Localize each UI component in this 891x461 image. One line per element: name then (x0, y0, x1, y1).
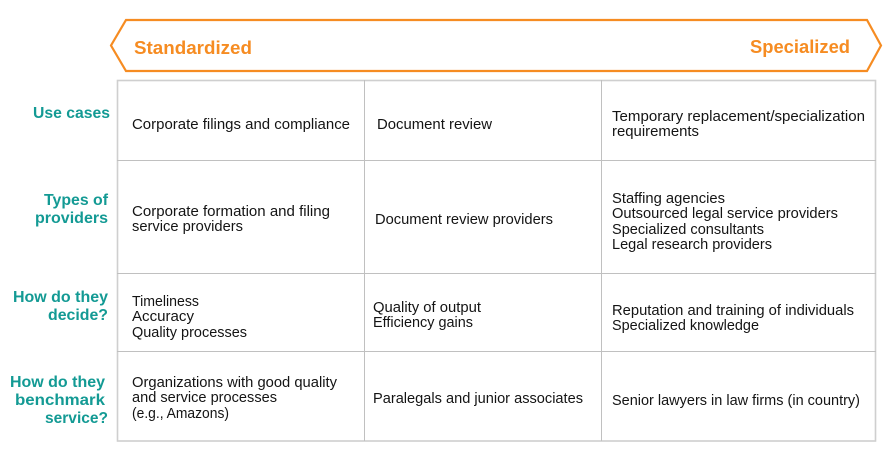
row heading: How do they benchmark service?: service? (45, 410, 108, 427)
row heading: Types of providers: providers (35, 210, 108, 227)
cell: providers, specialized: Legal research providers (612, 237, 772, 253)
table grid (117, 80, 876, 441)
cell: decision, standardized (132, 294, 247, 341)
row heading: How do they decide?: decide? (48, 307, 108, 324)
cell: benchmark, standardized: and service processes (132, 390, 277, 406)
cell: providers, specialized: Specialized consultants (612, 222, 764, 238)
cell: providers, middle: Document review providers (375, 212, 553, 228)
row heading: How do they decide?: How do they (13, 289, 108, 306)
label: Specialized: Specialized (750, 36, 850, 57)
row heading: How do they benchmark service?: benchmark (15, 392, 105, 409)
double-headed arrow banner: standardized to specialized (111, 20, 881, 71)
cell: decision, specialized: Reputation and training of individuals (612, 303, 854, 319)
row heading: Types of providers: Types of (44, 192, 109, 209)
row heading: How do they benchmark service? (10, 374, 108, 427)
cell: providers, standardized: Corporate formation and filing (132, 204, 330, 220)
cell: use case, specialized: requirements (612, 124, 699, 140)
cell: benchmark, middle: Paralegals and junior associates (373, 391, 583, 407)
row heading: Types of providers (35, 192, 109, 227)
cell: providers, standardized: service providers (132, 219, 243, 235)
cell: providers, standardized (132, 204, 330, 235)
cell: decision, middle (373, 300, 481, 331)
cell: providers, specialized: Outsourced legal service providers (612, 206, 838, 222)
cell: use case, specialized (612, 109, 865, 140)
label: Standardized: Standardized (134, 37, 252, 58)
cell: use case, middle: Document review (377, 117, 493, 133)
cell: use case, specialized: Temporary replacement/specialization (612, 109, 865, 125)
cell: benchmark, standardized: Organizations with good quality (132, 375, 338, 391)
row heading: How do they benchmark service?: How do they (10, 374, 105, 391)
cell: decision, standardized: Accuracy (132, 309, 195, 325)
cell: decision, middle: Efficiency gains (373, 315, 473, 331)
cell: providers, specialized (612, 191, 838, 253)
cell: benchmark, standardized: (e.g., Amazons) (132, 406, 229, 422)
row heading: Use cases: Use cases (33, 105, 110, 122)
cell: decision, standardized: Quality processes (132, 325, 247, 341)
cell: decision, middle: Quality of output (373, 300, 481, 316)
row heading: How do they decide? (13, 289, 108, 324)
cell: benchmark, standardized (132, 375, 338, 422)
cell: providers, specialized: Staffing agencies (612, 191, 725, 207)
cell: decision, standardized: Timeliness (132, 294, 199, 310)
cell: decision, specialized: Specialized knowledge (612, 318, 759, 334)
cell: use case, standardized: Corporate filings and compliance (132, 117, 350, 133)
cell: decision, specialized (612, 303, 854, 334)
cell: benchmark, specialized: Senior lawyers in law firms (in country) (612, 393, 860, 409)
